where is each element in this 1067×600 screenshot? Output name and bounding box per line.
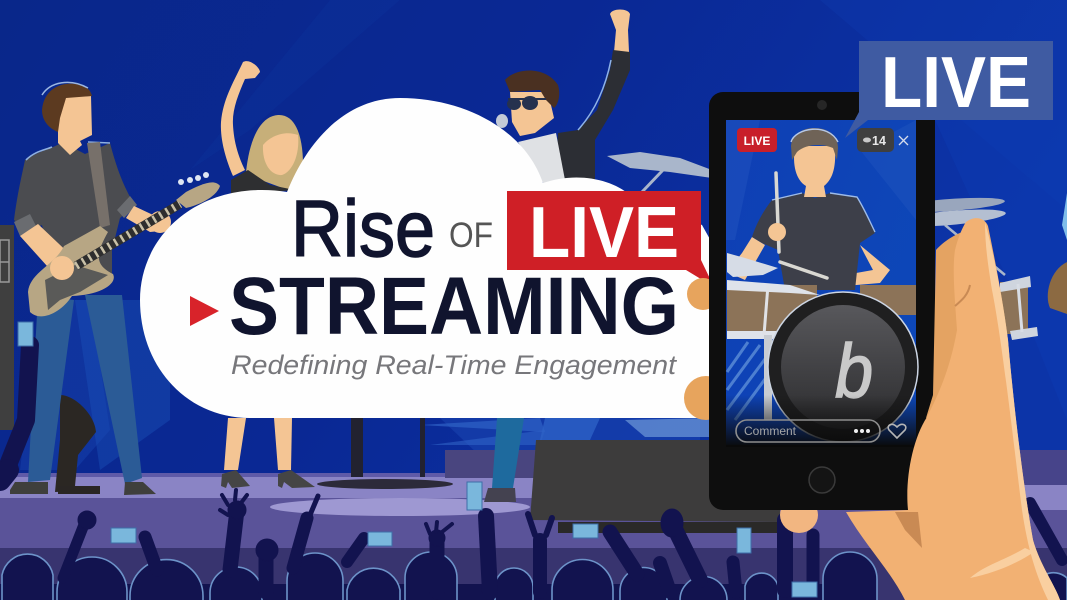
face (510, 92, 554, 136)
right tom drum (1000, 276, 1038, 340)
LIVE badge: LIVE (744, 134, 770, 148)
guitarist hair (42, 84, 92, 132)
guitarist shirt (14, 142, 135, 280)
word: Rise: Rise (291, 184, 435, 273)
wrist crease (970, 548, 1034, 578)
audience phones (18, 322, 817, 597)
drummer shirt (752, 193, 875, 290)
right cymbals (894, 195, 1006, 275)
drummer hair (791, 128, 838, 160)
word: OF: OF (449, 216, 493, 255)
phone screen (726, 120, 918, 447)
hair (505, 70, 559, 108)
guitarist (10, 82, 220, 495)
shadow crease (895, 512, 922, 548)
crowd shoulders band (0, 584, 860, 600)
stage backdrop (0, 0, 1067, 480)
guitarist shoes (10, 482, 156, 495)
guitar strap (87, 142, 110, 228)
right guitarist fragment (1048, 193, 1067, 314)
crowd arms and hands (0, 345, 1062, 592)
top (231, 170, 295, 195)
crowd (0, 322, 1067, 600)
cloud (140, 98, 716, 418)
guitarist arms (20, 206, 172, 278)
male singer (496, 10, 630, 190)
singer leg behind cloud (484, 418, 524, 502)
microphone (496, 114, 508, 128)
lower stripes (727, 342, 768, 420)
fingers behind phone (684, 278, 818, 533)
viewer count: 14 (872, 134, 886, 148)
jacket (555, 50, 630, 190)
screen fade (726, 395, 916, 447)
heels (221, 470, 315, 488)
arm highlight (578, 60, 611, 130)
bass guitar (28, 172, 220, 316)
blue LIVE speech bubble (845, 41, 1053, 138)
drummer (727, 128, 890, 290)
drummer hand (768, 223, 786, 241)
crowd heads with rim light (2, 552, 1067, 600)
home button (809, 467, 835, 493)
drum stand (764, 335, 772, 420)
legs (224, 418, 292, 470)
kick drum: b (835, 329, 873, 414)
stage floor (0, 450, 1067, 600)
blond hair (246, 115, 303, 190)
viewer count (857, 128, 894, 152)
palm and thumb (846, 218, 1060, 600)
phone body (709, 92, 935, 510)
face (263, 133, 298, 175)
raised arm (221, 61, 260, 176)
floor speaker on left (55, 395, 100, 492)
finger crease (955, 285, 970, 306)
kick drum (768, 292, 918, 442)
comment box (736, 420, 880, 442)
finger highlight (985, 222, 1060, 600)
title (190, 184, 714, 380)
tom drums (727, 280, 916, 339)
heart icon (888, 424, 906, 438)
sunglasses (507, 96, 546, 110)
play triangle (190, 296, 219, 326)
sleeves (14, 196, 137, 236)
close icon (899, 136, 908, 145)
amp at left edge (0, 225, 14, 430)
camera (817, 100, 827, 110)
stage monitor speaker (530, 440, 780, 533)
word: STREAMING: STREAMING (229, 261, 679, 352)
hand holding phone (846, 218, 1060, 600)
drum cymbal and stand (607, 152, 712, 192)
neck and face (794, 146, 835, 197)
smartphone (709, 92, 935, 510)
hair highlight (791, 129, 838, 142)
comment box: Comment (744, 424, 797, 438)
shoulder highlights (26, 142, 110, 160)
mic stands (317, 415, 453, 489)
red LIVE speech bubble: LIVE (529, 193, 679, 273)
guitarist neck and face (58, 96, 92, 155)
left cymbal (727, 253, 778, 277)
LIVE badge (737, 128, 777, 152)
red LIVE speech bubble (507, 191, 714, 287)
drummer arms (727, 237, 890, 287)
right side drum kit (894, 195, 1038, 340)
guitarist legs (28, 295, 142, 484)
shirt highlights (772, 193, 875, 232)
hair highlight (42, 82, 88, 95)
t-shirt (518, 133, 565, 186)
drumsticks (776, 173, 827, 278)
subtitle: Redefining Real-Time Engagement (231, 350, 678, 380)
blue LIVE speech bubble: LIVE (881, 43, 1031, 123)
female singer (221, 61, 315, 488)
raised fist (610, 10, 630, 52)
darker finger behind (926, 232, 975, 418)
